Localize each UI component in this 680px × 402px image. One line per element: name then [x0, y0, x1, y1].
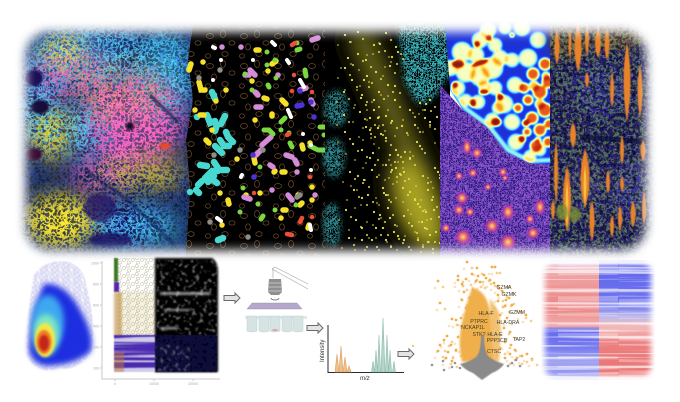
green peaks: [372, 318, 396, 372]
gene labels: [461, 285, 525, 355]
panel: heat map region: [446, 24, 550, 165]
cells: green: [240, 43, 326, 219]
arrow: [224, 293, 240, 303]
red spots: [452, 33, 530, 142]
purple band: [114, 335, 156, 372]
gene labels: NCKAP1L: [461, 325, 485, 331]
dot: [531, 359, 533, 361]
gene labels: CTSC: [487, 349, 501, 355]
arrow: [398, 349, 414, 359]
axis tick labels: 1000: [91, 262, 99, 266]
cells: pink: [222, 38, 318, 200]
orange points: scattered: [435, 262, 537, 368]
chart: multi-channel scatter plot: 0: [114, 382, 116, 386]
x axis label: m/z: [360, 376, 370, 382]
slide: [247, 303, 302, 309]
orange peaks: [335, 346, 351, 372]
yellow lumps: [442, 20, 546, 162]
chart: multi-channel scatter plot: [91, 258, 220, 386]
chart: density scatter plot: [27, 261, 93, 370]
spectrum axes: [328, 325, 404, 372]
gene labels: STK?: [473, 332, 486, 338]
cells: red and blue: [254, 43, 312, 235]
mottled red zone: [514, 58, 554, 152]
axis tick labels: [91, 262, 99, 370]
objective lens: [268, 279, 282, 295]
panel: 3D orange peak map: [548, 15, 660, 265]
axis tick labels: 600: [93, 304, 99, 308]
gene labels: HLA-F: [478, 311, 494, 317]
orange points: dense cloud: [460, 288, 493, 362]
red then blue columns: [541, 260, 599, 380]
panel: composite tissue imaging strip: [10, 10, 660, 265]
objective arm: [272, 267, 308, 289]
yellow dots: [337, 32, 447, 253]
panel: multiplex tissue image: [18, 24, 193, 258]
panel: yellow point density map: [320, 24, 450, 258]
chart: expression heatmap: [541, 260, 655, 383]
blue then red columns: [599, 260, 655, 380]
pink hotspots: [441, 138, 546, 251]
orange peaks: [551, 22, 646, 242]
scatter cloud: [27, 261, 93, 370]
cells: white and grey: [213, 42, 311, 230]
axis tick labels: 400: [93, 324, 99, 328]
row stripes: [541, 260, 655, 380]
gene labels: HLA-DRA: [497, 320, 520, 326]
gene labels: HLA-E: [487, 332, 503, 338]
axes: [100, 261, 220, 381]
chart: multi-channel scatter plot: 10000: [149, 382, 159, 386]
gene labels: GZMK: [502, 292, 517, 298]
region: teal cells: [320, 20, 455, 260]
chart: mass spectrum: [320, 318, 404, 382]
y axis label: Intensity: [320, 340, 326, 362]
icon: microscope over well plate: [245, 267, 308, 332]
axis tick labels: 100: [93, 366, 99, 370]
gene labels: PPP3CB: [487, 338, 508, 344]
gene labels: GZMM: [509, 310, 525, 316]
gray funnel: [460, 335, 504, 380]
axis tick labels: 200: [93, 346, 99, 350]
panel: purple tissue with pink hotspots: [440, 85, 552, 265]
arrow: [307, 323, 323, 333]
cell cluster: cyan: [190, 92, 233, 240]
well plate: [245, 316, 307, 332]
cells: yellow: [189, 50, 312, 228]
black scatter block: [155, 258, 218, 372]
chart: volcano plot: [432, 262, 537, 380]
panel: segmented cell map: [186, 24, 325, 258]
gene labels: TAP2: [513, 337, 525, 343]
white column scatter: [118, 258, 156, 336]
gene labels: GZMA: [496, 285, 512, 291]
axis tick labels: 800: [93, 282, 99, 286]
chart: multi-channel scatter plot: 20000: [188, 382, 198, 386]
gene labels: PTPRC: [470, 319, 488, 325]
dot: [412, 345, 414, 347]
